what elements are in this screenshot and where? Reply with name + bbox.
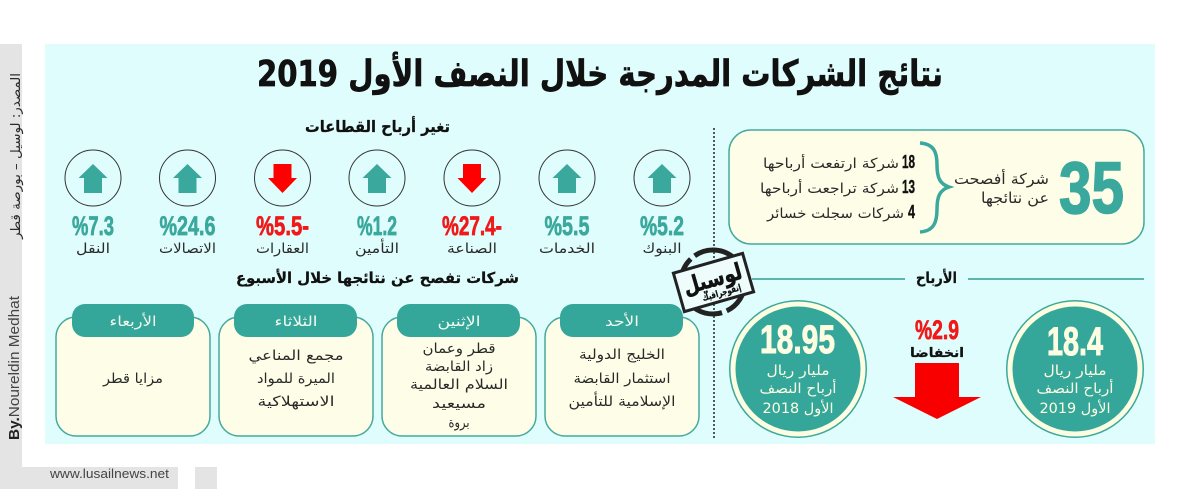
big number 35: 35 [1059, 148, 1124, 229]
circle: profits H1 2018: 18.95 [760, 318, 835, 362]
card: Monday: قطر وعمان [422, 341, 496, 357]
sector: industry [442, 150, 502, 257]
sector: industry: الصناعة [447, 241, 497, 257]
card: Tuesday [219, 304, 373, 436]
panel: companies summary [729, 130, 1144, 244]
card: Monday: مسيعيد [432, 396, 486, 412]
circle: profits H1 2019 [1006, 300, 1144, 438]
sector: transport: %7.3 [72, 211, 114, 241]
summary caption: شركة أفصحت [954, 169, 1049, 188]
stamp: Lusail infographic [673, 250, 754, 314]
heading: sector profit change: تغير أرباح القطاعات [305, 116, 450, 136]
heading: companies reporting this week: شركات تفصح عن نتائجها خلال الأسبوع [236, 269, 519, 287]
summary caption: عن نتائجها [981, 189, 1049, 207]
breakdown list: 18 [902, 152, 915, 172]
summary caption [954, 169, 1049, 207]
card: Monday: الإثنين [438, 314, 480, 330]
sector: banks [634, 150, 690, 257]
decline callout: انخفاضا [910, 346, 964, 361]
card: Sunday: الإسلامية للتأمين [568, 391, 676, 410]
grey side strip [0, 44, 22, 489]
icon: big red down arrow [893, 363, 981, 419]
breakdown list: شركات سجلت خسائر [766, 206, 904, 222]
circle: profits H1 2019: أرباح النصف [1036, 379, 1114, 397]
sector: insurance: %1.2 [357, 211, 397, 241]
sector: transport [65, 150, 121, 257]
sector: industry: %27.4- [442, 211, 502, 241]
card: Monday [382, 304, 536, 436]
website url: www.lusailnews.net [49, 466, 169, 481]
card: Tuesday: الميرة للمواد [257, 371, 335, 387]
card: Sunday: الأحد [605, 312, 639, 330]
sector: banks: %5.2 [640, 211, 684, 241]
sector: real estate: %5.5- [256, 211, 309, 241]
card: Tuesday: الاستهلاكية [258, 394, 334, 410]
card: Wednesday: مزايا قطر [102, 371, 163, 387]
circle: profits H1 2019: الأول 2019 [1040, 399, 1110, 417]
stamp: Lusail infographic: لوسيل [680, 259, 745, 300]
author credit: By.Noureldin Medhat [6, 295, 23, 440]
sector: real estate [254, 150, 310, 257]
breakdown list [760, 152, 915, 222]
card: Monday: بروة [448, 415, 470, 431]
decline callout [893, 315, 981, 419]
grey bottom block [195, 467, 217, 489]
source credit: المصدر: لوسيل – بورصة قطر [9, 73, 24, 240]
sector: services: %5.5 [544, 211, 590, 241]
breakdown list: شركة ارتفعت أرباحها [763, 154, 899, 172]
card: Sunday: استثمار القابضة [574, 371, 670, 387]
sector: services: الخدمات [539, 241, 595, 257]
circle: profits H1 2019: 18.4 [1047, 320, 1104, 364]
sector: services [539, 150, 595, 257]
stamp: Lusail infographic: إنفوجرافيك [701, 283, 742, 304]
circle: profits H1 2018: أرباح النصف [760, 379, 837, 397]
circle: profits H1 2018: مليار ريال [766, 363, 830, 379]
sector: insurance: التأمين [355, 238, 399, 257]
curly brace [920, 143, 949, 232]
title: نتائج الشركات المدرجة خلال النصف الأول 2019 [257, 51, 943, 95]
sector: insurance [349, 150, 405, 257]
sector: telecom: %24.6 [160, 211, 216, 241]
sector: telecom [159, 150, 216, 257]
card: Tuesday: الثلاثاء [274, 314, 318, 330]
card: Monday: السلام العالمية [410, 377, 508, 393]
grey bottom strip [22, 467, 178, 489]
card: Tuesday: مجمع المناعي [248, 348, 344, 364]
breakdown list: 4 [908, 202, 915, 222]
breakdown list: 13 [902, 177, 915, 197]
circle: profits H1 2018 [729, 300, 867, 438]
card: Monday: زاد القابضة [425, 359, 493, 375]
main panel background [45, 44, 1155, 444]
card: Wednesday [56, 304, 210, 436]
sector: transport: النقل [76, 241, 110, 257]
breakdown list: شركة تراجعت أرباحها [760, 179, 899, 197]
sector: telecom: الاتصالات [159, 241, 216, 257]
heading: profits with rule: الأرباح [916, 269, 957, 287]
sector: banks: البنوك [642, 241, 682, 257]
circle: profits H1 2019: مليار ريال [1044, 363, 1106, 379]
sector: real estate: العقارات [256, 241, 309, 257]
circle: profits H1 2018: الأول 2018 [762, 399, 834, 417]
card: Sunday: الخليج الدولية [579, 347, 665, 363]
decline callout: %2.9 [915, 315, 959, 345]
card: Wednesday: الأربعاء [110, 312, 156, 330]
card: Sunday [545, 304, 699, 436]
vertical dotted divider [713, 128, 715, 440]
